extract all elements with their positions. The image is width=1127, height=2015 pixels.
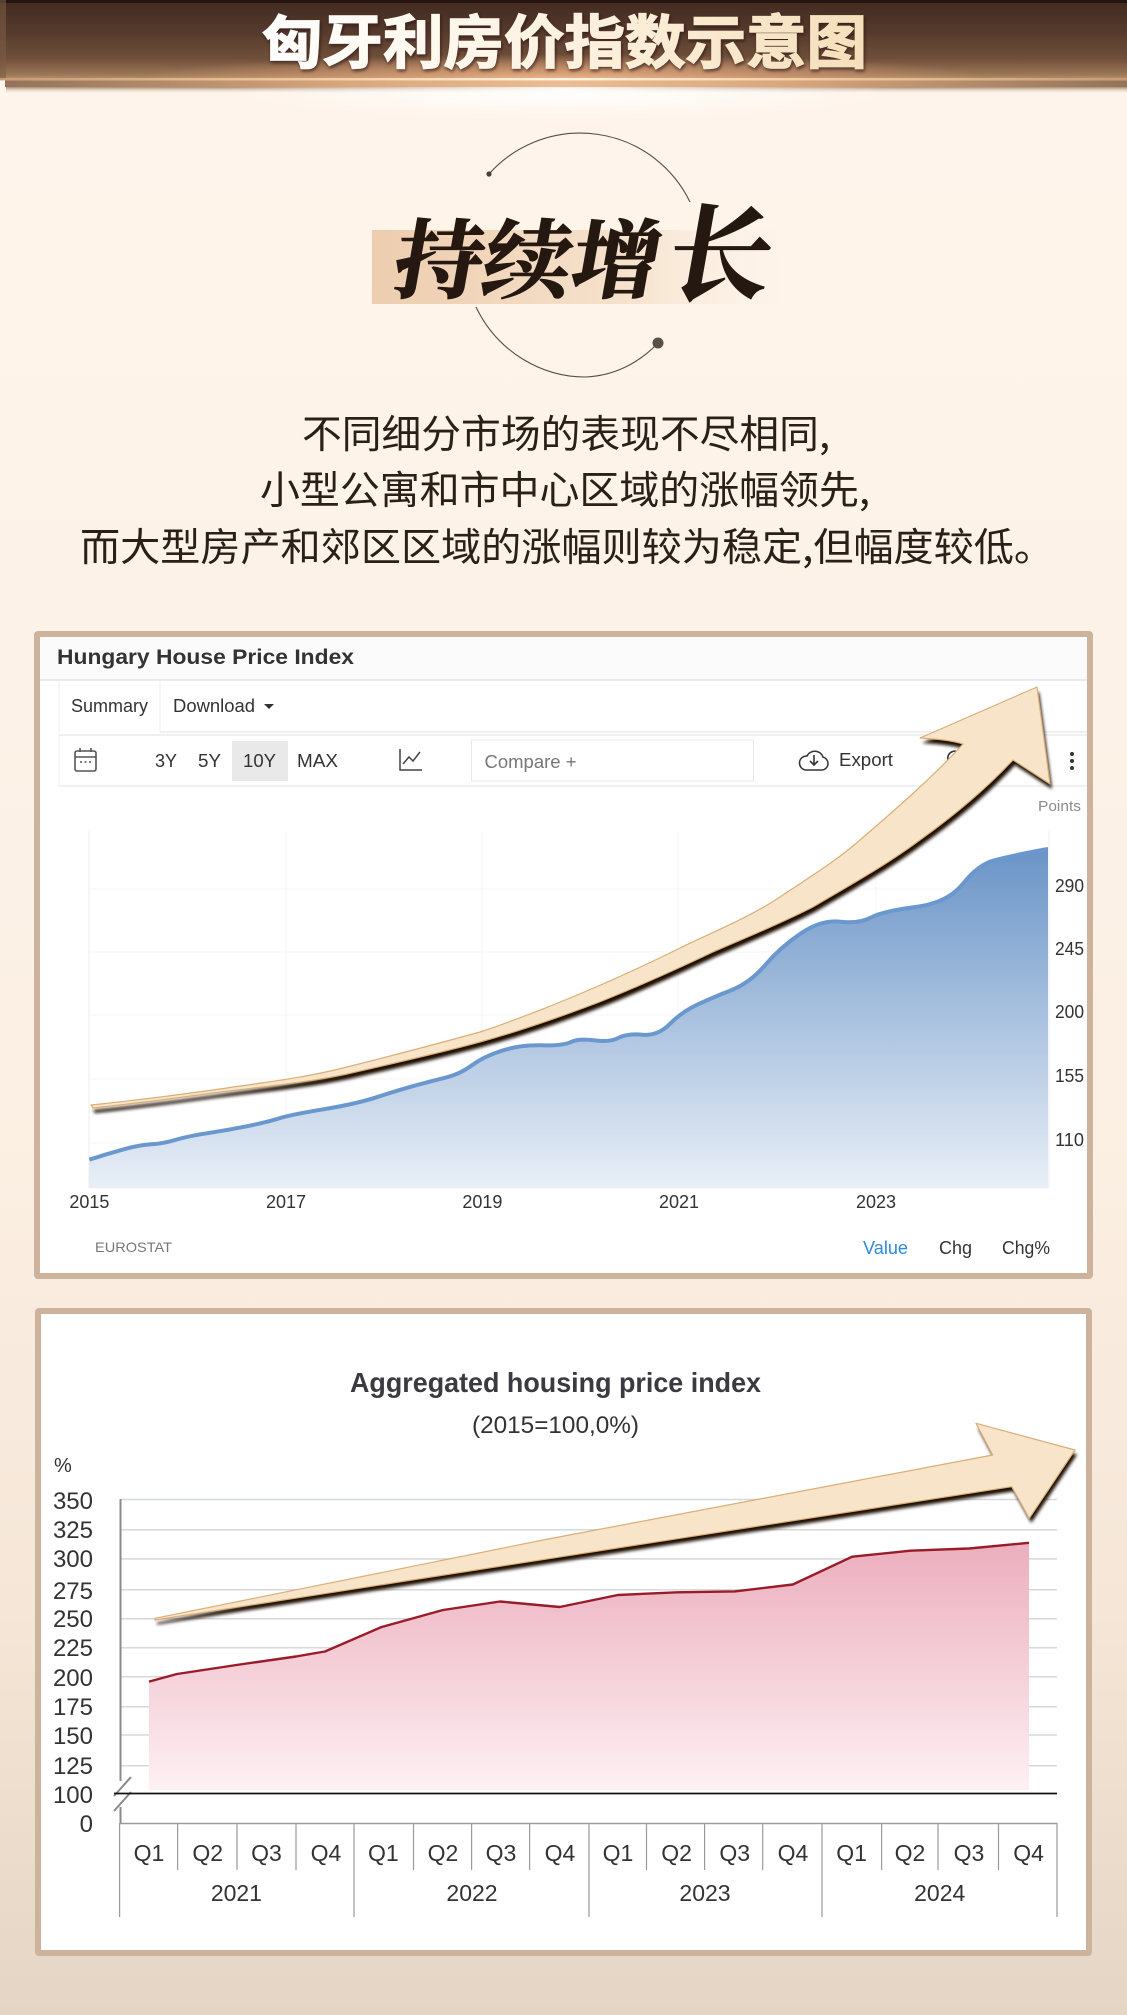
x axis quarter labels: Q1 [603, 1840, 633, 1866]
export [799, 750, 893, 770]
toolbar: 5Y [198, 751, 221, 771]
intro text block: 而大型房产和郊区区域的涨幅则较为稳定,但幅度较低。 [80, 517, 1054, 573]
y axis labels: 175 [53, 1694, 93, 1721]
x axis quarter labels: Q3 [954, 1840, 984, 1866]
x axis quarter labels: Q2 [661, 1840, 692, 1866]
toolbar: 3Y [155, 751, 177, 771]
tab bar: Summary [71, 696, 148, 716]
y axis labels: 225 [53, 1635, 93, 1662]
header banner [0, 0, 1127, 106]
y axis labels: 350 [53, 1488, 93, 1515]
area chart: house price index: 2015 [69, 1192, 109, 1212]
tab bar [40, 680, 1087, 732]
value / change toggles: Chg [939, 1238, 972, 1258]
headline: 持续增长: 持续增 [386, 192, 673, 316]
chart subtitle: (2015=100,0%) [472, 1412, 639, 1439]
area chart: house price index: 2019 [462, 1192, 502, 1212]
area chart: house price index: 2023 [856, 1192, 896, 1212]
x axis year labels: 2021 [211, 1880, 262, 1906]
headline ornament: arcs [476, 133, 690, 377]
area chart: house price index: Points [1038, 798, 1081, 815]
x axis quarter labels: Q1 [836, 1840, 867, 1866]
area chart: house price index: 2017 [266, 1192, 306, 1212]
area chart: aggregated index [149, 1543, 1029, 1790]
x axis year labels: 2024 [914, 1880, 965, 1906]
toolbar: 10Y [243, 751, 276, 771]
compare box [472, 740, 754, 781]
x axis year labels: 2022 [446, 1880, 498, 1906]
x axis quarter labels: Q3 [719, 1840, 750, 1866]
compare box: Compare + [484, 752, 576, 772]
area chart: house price index: 245 [1055, 939, 1084, 959]
icon: menu dots [1070, 752, 1074, 770]
icon: calendar [75, 748, 96, 771]
area chart: house price index: 290 [1055, 876, 1084, 896]
x axis quarter labels: Q1 [134, 1840, 164, 1866]
x axis year labels [211, 1880, 965, 1906]
x axis year labels: 2023 [679, 1880, 731, 1906]
source label: EUROSTAT [95, 1239, 172, 1255]
x axis quarter labels: Q4 [778, 1840, 809, 1866]
y axis labels: 250 [53, 1606, 93, 1633]
x axis quarter labels: Q3 [251, 1840, 282, 1866]
headline: 持续增长 [372, 172, 802, 322]
area chart: house price index: 110 [1055, 1130, 1084, 1150]
y axis labels: 0 [80, 1811, 93, 1838]
intro text block [80, 404, 1054, 573]
area chart: house price index [69, 798, 1084, 1212]
value / change toggles: Value [863, 1238, 908, 1258]
x axis quarter labels: Q2 [192, 1840, 223, 1866]
panel title: Hungary House Price Index [57, 645, 354, 669]
y axis labels: 100 [53, 1782, 93, 1809]
y axis labels: 325 [53, 1517, 93, 1544]
gridlines and axes [114, 1499, 1057, 1824]
x axis quarter labels: Q2 [428, 1840, 458, 1866]
export: Export [839, 750, 893, 770]
y axis labels: 275 [53, 1578, 93, 1605]
panel: Hungary House Price Index [37, 634, 1090, 1276]
toolbar: MAX [297, 751, 338, 771]
value / change toggles [863, 1238, 1050, 1258]
chart title: Aggregated housing price index [350, 1367, 761, 1398]
x axis quarter labels: Q4 [545, 1840, 576, 1866]
panel: Aggregated housing price index [38, 1311, 1089, 1953]
x axis quarter labels: Q4 [311, 1840, 342, 1866]
y axis labels [53, 1488, 93, 1838]
y axis labels: 150 [53, 1723, 93, 1750]
x axis quarter labels: Q1 [368, 1840, 399, 1866]
arrow: straight upward trend [155, 1423, 1077, 1624]
toolbar [59, 735, 1087, 786]
area chart: house price index: 200 [1055, 1002, 1084, 1022]
y axis unit: % [54, 1455, 72, 1477]
x axis quarter labels: Q3 [486, 1840, 516, 1866]
intro text block: 小型公寓和市中心区域的涨幅领先, [260, 460, 870, 516]
intro text block: 不同细分市场的表现不尽相同, [302, 404, 830, 460]
x axis quarter labels: Q4 [1013, 1840, 1044, 1866]
x axis quarter labels: Q2 [895, 1840, 925, 1866]
icon: line chart [400, 749, 422, 770]
x axis ticks [120, 1823, 1057, 1917]
tab bar: Download [173, 696, 255, 716]
y axis labels: 200 [53, 1665, 93, 1692]
y axis labels: 125 [53, 1753, 93, 1780]
value / change toggles: Chg% [1002, 1238, 1050, 1258]
y axis labels: 300 [53, 1546, 93, 1573]
x axis quarter labels [134, 1840, 1044, 1866]
arrow: curved upward trend [91, 687, 1052, 1113]
area chart: house price index: 155 [1055, 1066, 1084, 1086]
headline: 持续增长: 长 [658, 172, 787, 322]
area chart: house price index: 2021 [659, 1192, 699, 1212]
